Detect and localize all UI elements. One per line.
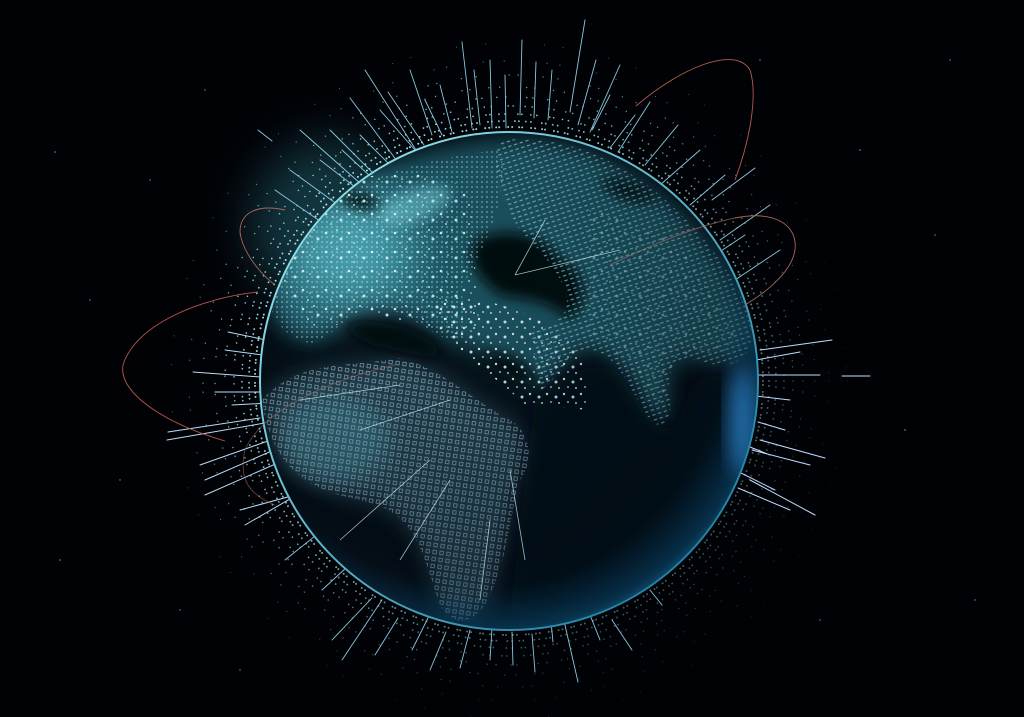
globe <box>260 132 758 630</box>
globe sphere <box>260 132 758 630</box>
brightness: Greenland <box>376 179 456 230</box>
orbit: lower-left inner <box>243 365 395 505</box>
orbit arcs <box>123 60 795 505</box>
landmass glow: Europe and northern Asia <box>268 139 753 425</box>
blue limb glow <box>322 254 757 629</box>
landmass glow: Africa <box>262 358 529 620</box>
dot matrix: Eurasia <box>496 139 751 425</box>
specks: Europe lights <box>270 174 480 340</box>
orbit: left <box>123 292 258 441</box>
orbit: inner right <box>610 218 735 265</box>
particle cloud around globe <box>171 43 847 717</box>
light rays radiating from globe <box>167 20 870 682</box>
orbit: upper left <box>240 208 285 285</box>
bright blue patch right edge <box>729 365 755 475</box>
square matrix: Africa <box>262 358 529 620</box>
specks: Asia lights <box>585 210 740 410</box>
dark Indian Ocean <box>516 360 674 521</box>
globe rim <box>260 132 758 630</box>
dot matrix: Europe <box>268 150 503 343</box>
orbit: upper right <box>636 60 753 180</box>
dark sea patches <box>340 180 655 385</box>
halo: soft glow upper left <box>250 140 410 310</box>
orbit: right <box>735 216 795 305</box>
inner rays crossing the surface <box>300 220 620 600</box>
specks: Middle East city lights <box>430 297 590 410</box>
teal patch west Africa <box>280 398 390 482</box>
brightness: upper-left Europe <box>275 190 415 310</box>
